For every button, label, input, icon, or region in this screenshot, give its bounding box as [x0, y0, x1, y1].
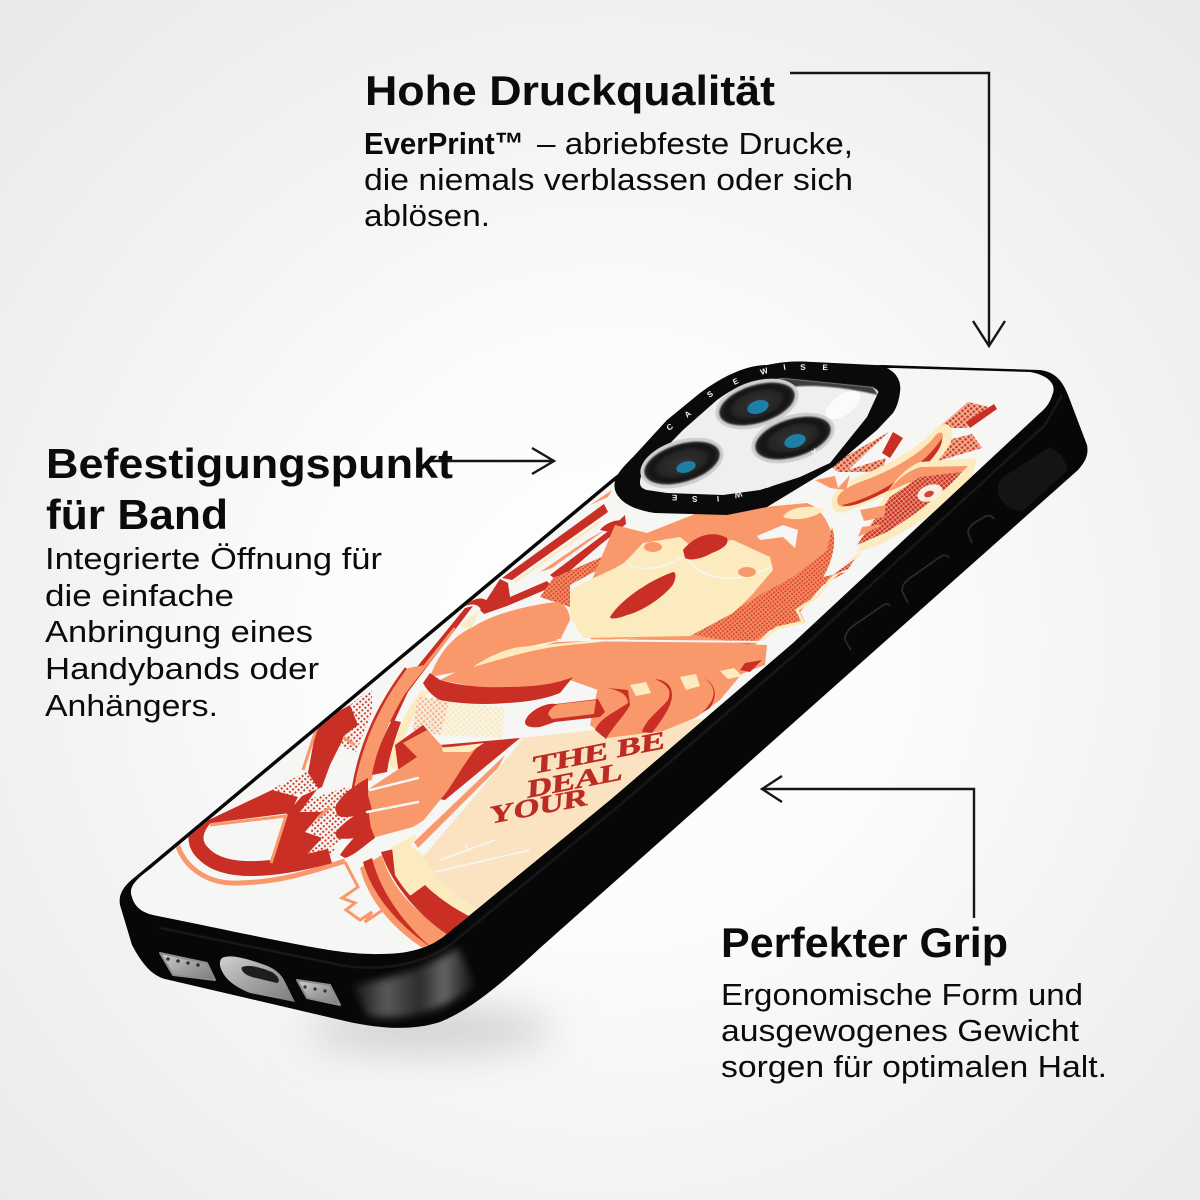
artwork: ribbon	[177, 688, 390, 922]
ribbon halftones	[270, 688, 372, 862]
side switch	[998, 447, 1068, 511]
ribbon outer outline	[177, 843, 345, 883]
slogan: YOUR	[489, 782, 589, 830]
panda shading	[690, 527, 846, 645]
ring bottom bands	[360, 855, 449, 948]
text block: print quality: die niemals verblassen oder sich	[364, 162, 853, 197]
phone case	[120, 365, 1088, 1028]
case body	[120, 365, 1088, 1028]
panda face	[570, 537, 773, 638]
panda fingers	[590, 670, 745, 738]
slogan	[490, 732, 664, 824]
text block: strap attachment: die einfache	[45, 578, 234, 613]
ribbon top bar	[204, 790, 298, 824]
lens right	[745, 403, 841, 473]
fringe spike	[833, 559, 855, 575]
bump frame	[614, 361, 900, 515]
charging port	[220, 956, 295, 1002]
lens left	[634, 428, 730, 498]
ribbon inner lines	[210, 727, 355, 863]
heading: strap attachment: Befestigungspunkt	[46, 440, 453, 487]
camera window	[640, 378, 878, 495]
printed artwork	[130, 368, 1054, 954]
text block: print quality: ablösen.	[364, 198, 490, 233]
text block: print quality: EverPrint™	[364, 126, 524, 161]
side button: volume down	[845, 604, 890, 650]
slogan: THE BE	[532, 726, 666, 780]
panda mouth	[610, 572, 676, 618]
arrow: print quality	[790, 73, 1005, 346]
speaker left	[160, 953, 215, 980]
fish	[857, 458, 977, 552]
panda arm	[430, 602, 570, 677]
text block: grip: ausgewogenes Gewicht	[721, 1013, 1079, 1048]
artwork: lower hand	[335, 725, 520, 858]
window shadow	[758, 378, 878, 395]
text block: strap attachment: Anhängers.	[45, 688, 218, 723]
flash	[821, 385, 865, 425]
hot dog	[832, 424, 952, 513]
text block: grip: sorgen für optimalen Halt.	[721, 1049, 1107, 1084]
artwork: poster with slogan	[410, 718, 710, 912]
bump branding lower: CASEWISE	[671, 428, 843, 503]
arrow: strap attachment	[430, 448, 554, 474]
panda nose	[683, 534, 728, 559]
corner gloss	[352, 948, 475, 1018]
cigar	[525, 699, 605, 727]
bump branding top: CASEWISE	[665, 363, 829, 433]
artwork: red panda	[423, 503, 860, 739]
jagged flash	[342, 862, 390, 922]
artwork: outer ring	[353, 665, 495, 958]
speaker right	[297, 980, 340, 1005]
panda cheeks	[644, 542, 662, 552]
side button: action	[968, 516, 994, 543]
lens top	[709, 369, 805, 439]
text block: grip: Ergonomische Form und	[721, 977, 1083, 1012]
text block: print quality	[364, 126, 853, 233]
arrow: grip	[762, 776, 974, 918]
text block: print quality: – abriebfeste Drucke,	[537, 126, 853, 161]
panda head	[575, 503, 833, 650]
slogan: DEAL	[527, 757, 623, 804]
artwork: top-right burst	[815, 402, 997, 552]
ribbon loop	[196, 818, 330, 869]
text block: strap attachment: Anbringung eines	[45, 614, 313, 649]
text block: strap attachment: Integrierte Öffnung für	[45, 541, 382, 576]
side button: volume up	[902, 555, 949, 603]
heading: strap attachment: für Band	[46, 491, 228, 538]
heading: print quality: Hohe Druckqualität	[365, 67, 775, 114]
heading: strap attachment	[46, 440, 453, 538]
panda ear patches	[757, 525, 798, 548]
fingers	[335, 778, 372, 817]
panda arm shadow	[423, 673, 573, 704]
ribbon diagonal	[268, 705, 358, 867]
screen background	[130, 368, 1054, 954]
heading: grip: Perfekter Grip	[721, 919, 1008, 966]
text block: strap attachment	[45, 541, 382, 723]
artwork: upper-left streaks	[372, 490, 630, 722]
text block: strap attachment: Handybands oder	[45, 651, 319, 686]
text block: grip	[721, 977, 1107, 1084]
inner ridge	[160, 395, 1062, 968]
fringe outline	[762, 553, 860, 640]
camera bump	[614, 361, 900, 515]
phone shadow	[305, 1008, 555, 1052]
artwork: halftone panel	[412, 697, 505, 738]
